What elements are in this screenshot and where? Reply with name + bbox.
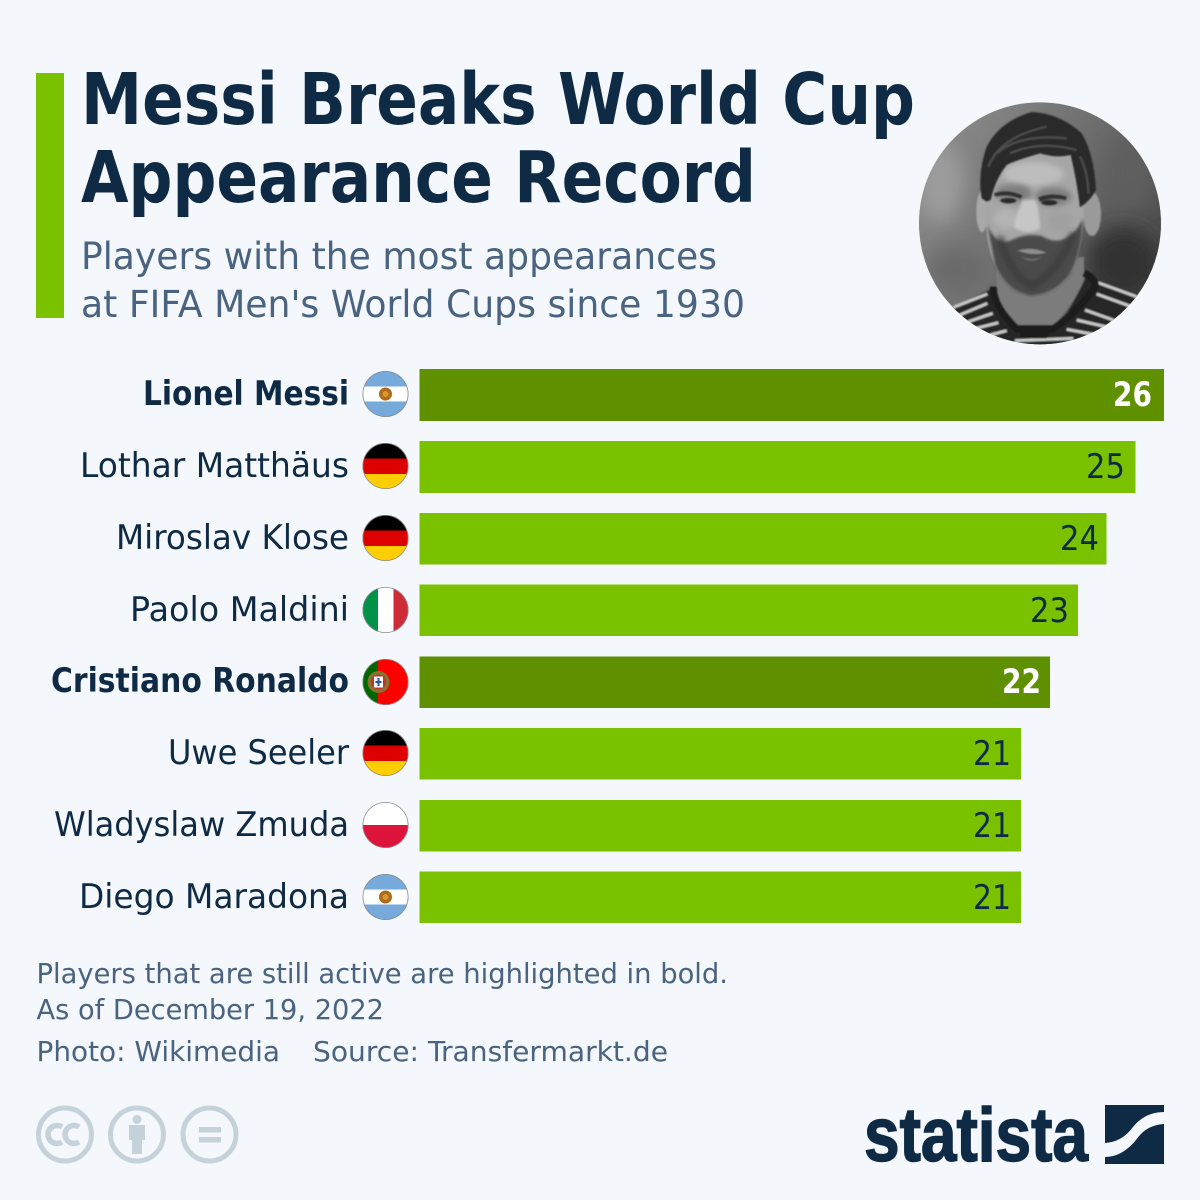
footnote — [36, 958, 728, 1026]
row: Diego Maradona: 21 — [973, 878, 1011, 917]
green accent bar — [36, 73, 64, 318]
footnote: Players that are still active are highlighted in bold. — [36, 958, 728, 990]
icon: no derivatives — [183, 1108, 236, 1161]
row: Lothar Matthäus — [80, 441, 1136, 493]
icon: statista mark — [1105, 1105, 1164, 1164]
neck — [997, 257, 1084, 327]
face — [985, 152, 1084, 295]
row: Miroslav Klose: Miroslav Klose — [116, 518, 349, 557]
beard — [987, 218, 1083, 296]
row: Lothar Matthäus: 25 — [1086, 447, 1125, 486]
title — [81, 58, 915, 219]
row: Wladyslaw Zmuda: 21 — [973, 806, 1011, 845]
row: Cristiano Ronaldo: 22 — [1002, 662, 1041, 701]
row: Paolo Maldini: 23 — [1030, 591, 1069, 630]
subtitle — [81, 235, 745, 326]
row: Uwe Seeler: 21 — [973, 734, 1011, 773]
source line: Photo: Wikimedia — [36, 1036, 280, 1068]
bar chart — [51, 369, 1164, 923]
hair — [980, 112, 1096, 207]
source line: Source: Transfermarkt.de — [313, 1036, 668, 1068]
footnote: As of December 19, 2022 — [36, 994, 384, 1026]
nose — [1014, 200, 1040, 232]
row: Uwe Seeler: Uwe Seeler — [168, 733, 349, 772]
row: Diego Maradona — [79, 872, 1021, 923]
row: Cristiano Ronaldo: Cristiano Ronaldo — [51, 661, 349, 700]
title: Messi Breaks World Cup — [81, 58, 915, 141]
shirt — [952, 256, 1138, 344]
row: Lothar Matthäus: Lothar Matthäus — [80, 446, 349, 485]
row: Lionel Messi: 26 — [1113, 375, 1152, 414]
subtitle: at FIFA Men's World Cups since 1930 — [81, 283, 745, 326]
photo: Lionel Messi portrait — [917, 100, 1167, 357]
statista logo: statista — [864, 1093, 1089, 1178]
subtitle: Players with the most appearances — [81, 235, 717, 278]
row: Miroslav Klose — [116, 513, 1106, 564]
row: Wladyslaw Zmuda: Wladyslaw Zmuda — [54, 805, 349, 844]
row: Diego Maradona: Diego Maradona — [79, 877, 349, 916]
row: Lionel Messi: Lionel Messi — [143, 374, 349, 413]
row: Cristiano Ronaldo — [51, 656, 1050, 708]
icon: attribution — [110, 1108, 164, 1161]
row: Paolo Maldini — [130, 584, 1078, 636]
icon: creative commons — [38, 1108, 92, 1161]
eyes and brows — [994, 191, 1067, 205]
row: Paolo Maldini: Paolo Maldini — [130, 590, 349, 629]
row: Lionel Messi — [143, 369, 1164, 421]
row: Miroslav Klose: 24 — [1060, 519, 1099, 558]
ears — [976, 191, 988, 232]
source line — [36, 1036, 668, 1068]
title: Appearance Record — [81, 136, 756, 219]
row: Uwe Seeler — [168, 728, 1021, 780]
row: Wladyslaw Zmuda — [54, 800, 1021, 852]
